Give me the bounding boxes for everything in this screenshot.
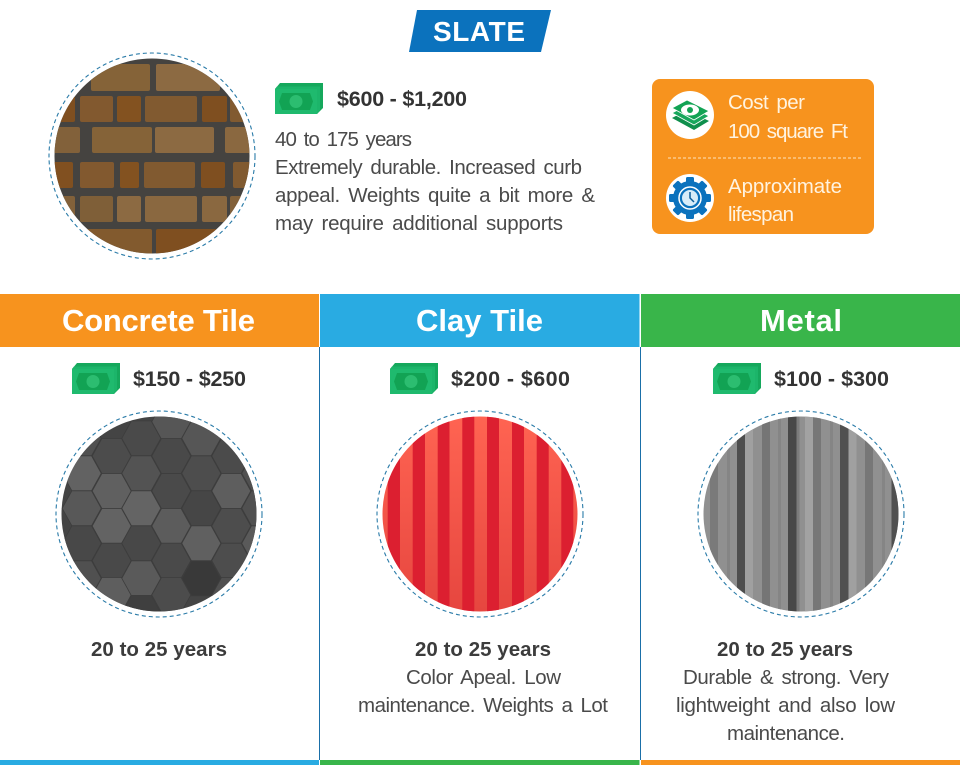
- concrete price: $150 - $250: [133, 367, 246, 391]
- legend text: cost: [728, 91, 848, 143]
- slate title badge: [409, 10, 551, 52]
- icon: gear clock: [666, 174, 714, 222]
- metal roof image: [698, 411, 904, 617]
- clay price icon: [390, 363, 438, 394]
- slate title badge: SLATE: [433, 16, 525, 47]
- panel: metal: [641, 294, 960, 745]
- metal lifespan and description: [676, 638, 895, 745]
- concrete price icon: [72, 363, 120, 394]
- heading: clay tile: Clay Tile: [416, 303, 543, 338]
- icon: money stack: [666, 91, 714, 139]
- concrete tile image: [55, 410, 263, 618]
- heading: metal: [641, 294, 960, 347]
- clay lifespan and description: maintenance. Weights a Lot: [358, 694, 608, 717]
- panel: legend: [652, 79, 874, 234]
- slate description: may require additional supports: [275, 212, 563, 235]
- legend text: cost: Cost per: [728, 91, 805, 114]
- heading: clay tile: [320, 294, 640, 347]
- heading: metal: Metal: [760, 303, 842, 338]
- slate description: Extremely durable. Increased curb: [275, 156, 582, 179]
- clay tile image: [377, 411, 583, 617]
- metal lifespan and description: Durable & strong. Very: [683, 666, 890, 689]
- heading: concrete tile: Concrete Tile: [62, 303, 255, 338]
- legend text: lifespan: lifespan: [728, 203, 794, 226]
- heading: concrete tile: [0, 294, 319, 347]
- clay lifespan and description: [358, 638, 608, 717]
- legend text: cost: 100 square Ft: [728, 120, 848, 143]
- slate price icon: [275, 83, 323, 114]
- slate roof image: [49, 53, 255, 259]
- legend text: lifespan: Approximate: [728, 175, 842, 198]
- slate price: $600 - $1,200: [337, 87, 467, 111]
- concrete lifespan: 20 to 25 years: [91, 638, 227, 661]
- slate description: [275, 128, 595, 235]
- slate description: 40 to 175 years: [275, 128, 412, 151]
- panel: clay tile: [320, 294, 640, 717]
- clay lifespan and description: Color Apeal. Low: [406, 666, 561, 689]
- panel: concrete tile: [0, 294, 319, 661]
- metal lifespan and description: maintenance.: [727, 722, 845, 745]
- metal lifespan and description: 20 to 25 years: [717, 638, 853, 661]
- clay price: $200 - $600: [451, 367, 570, 391]
- next row color strip: [0, 760, 960, 765]
- slate description: appeal. Weights quite a bit more &: [275, 184, 595, 207]
- metal lifespan and description: lightweight and also low: [676, 694, 895, 717]
- legend text: lifespan: [728, 175, 842, 226]
- metal price icon: [713, 363, 761, 394]
- clay lifespan and description: 20 to 25 years: [415, 638, 551, 661]
- metal price: $100 - $300: [774, 367, 889, 391]
